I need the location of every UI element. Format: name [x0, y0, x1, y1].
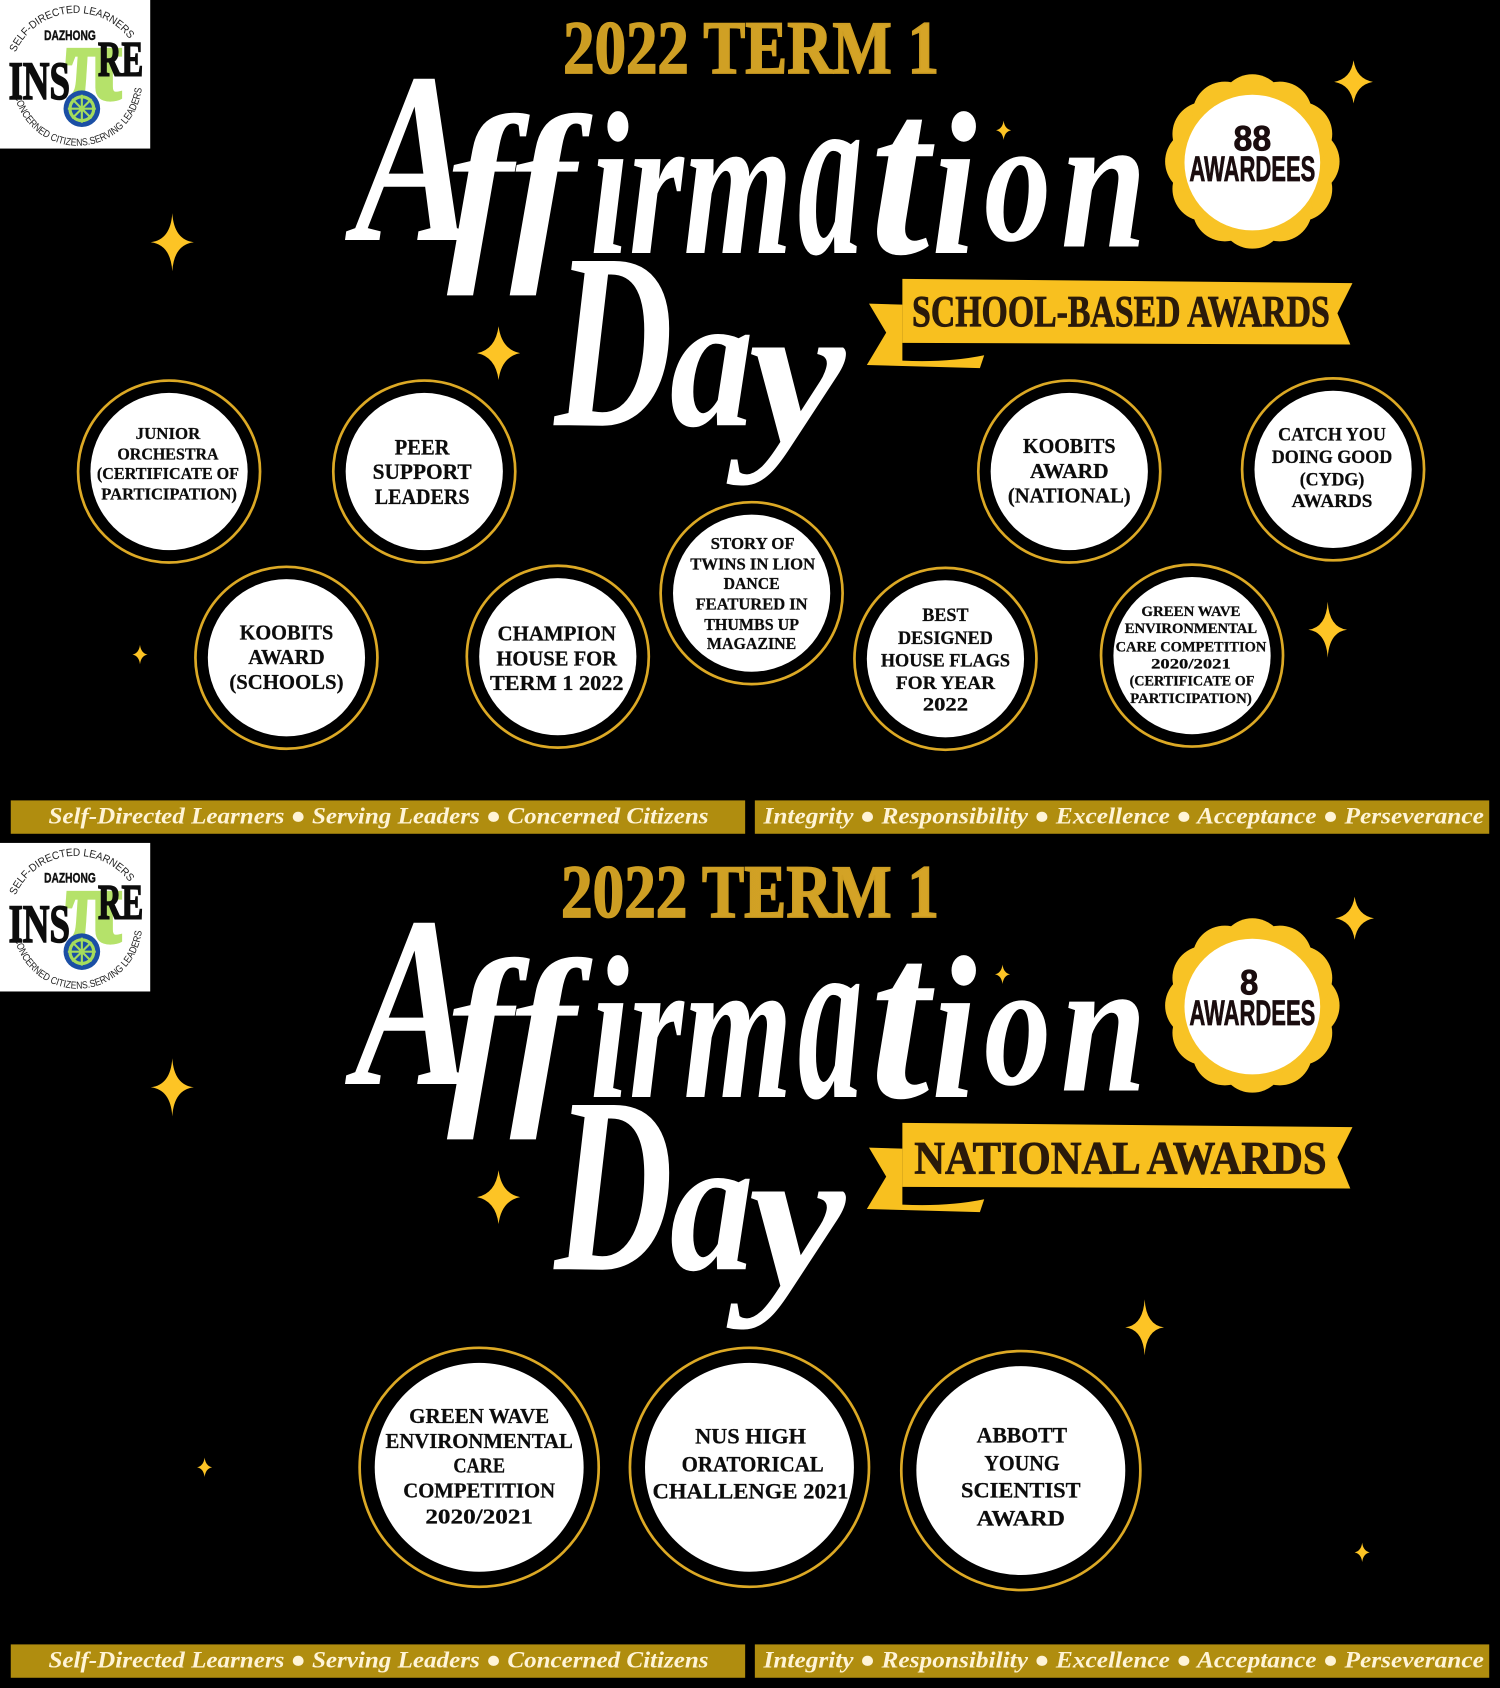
award: Koobits Award (National): KOOBITS: [1023, 434, 1116, 458]
heading: 2022 Term 1: 2022 TERM 1: [561, 851, 939, 934]
award: Koobits Award (National): AWARD: [1030, 459, 1109, 483]
logo: Dazhong Inspire: RE: [98, 31, 143, 86]
award: Best Designed House Flags: FOR YEAR: [896, 673, 995, 694]
award: NUS High Oratorical Challenge: ORATORICAL: [682, 1452, 824, 1477]
award: Champion House: HOUSE FOR: [496, 646, 617, 670]
title: Affirmation: ff: [447, 77, 593, 297]
award: Catch You Doing Good: AWARDS: [1292, 491, 1372, 512]
award: Best Designed House Flags: BEST: [922, 605, 969, 626]
award: Peer Support Leaders: LEADERS: [375, 484, 469, 509]
title: Day: a: [670, 252, 754, 467]
award: Peer Support Leaders: SUPPORT: [373, 459, 472, 484]
panel: national awards: [0, 842, 1490, 1678]
footer bar: learner outcomes: [11, 1644, 745, 1678]
ribbon: national awards: [867, 1123, 1352, 1212]
award: Junior Orchestra: [78, 381, 260, 562]
logo: Dazhong Inspire: RE: [98, 874, 143, 929]
award: Best Designed House Flags: [854, 568, 1036, 750]
award: Junior Orchestra: (CERTIFICATE OF: [97, 464, 239, 483]
award: Abbott Young Scientist: AWARD: [977, 1505, 1065, 1530]
logo: Dazhong Inspire: INS: [9, 51, 70, 111]
logo: Dazhong Inspire: SELF-DIRECTED LEARNERS: [10, 848, 134, 894]
award: Abbott Young Scientist: [901, 1351, 1140, 1590]
heading: 2022 Term 1: 2022 TERM 1: [563, 7, 939, 90]
award: NUS High Oratorical Challenge: [630, 1348, 869, 1587]
logo: Dazhong Inspire: π: [66, 4, 122, 123]
award: Green Wave Environmental Care: GREEN WAVE: [409, 1404, 549, 1428]
title: Affirmation: irm: [590, 916, 793, 1142]
ribbon: school-based awards: [867, 279, 1352, 368]
award: Best Designed House Flags: DESIGNED: [898, 628, 993, 649]
logo: Dazhong Inspire: π: [66, 847, 122, 966]
sparkle stars: [132, 60, 1373, 664]
award: Koobits Award (Schools): [195, 567, 377, 749]
title: Affirmation: ff: [447, 921, 593, 1141]
footer bar: learner outcomes: Self-Directed Learners ● Serving Leaders ● Concerned Citizens: [48, 1648, 709, 1674]
logo: Dazhong Inspire: [0, 0, 150, 149]
title: Affirmation: A: [345, 866, 474, 1137]
award: Green Wave Environmental Care: 2020/2021: [425, 1504, 533, 1528]
panel: school-based awards: [0, 0, 1490, 843]
sparkle stars: [151, 897, 1374, 1562]
title: Affirmation: i: [931, 916, 977, 1142]
award: Green Wave certificate: [1101, 565, 1283, 747]
title: Day: y: [726, 1104, 847, 1330]
award: Story of Twins: DANCE: [724, 574, 780, 593]
award: Story of Twins: [661, 502, 843, 684]
logo: Dazhong Inspire: DAZHONG: [44, 27, 96, 43]
footer bar: values: Integrity ● Responsibility ● Excellence ● Acceptance ● Perseverance: [762, 1648, 1484, 1674]
title: Affirmation: o: [984, 83, 1051, 279]
title: Day: D: [553, 202, 673, 480]
award: Green Wave certificate: ENVIRONMENTAL: [1125, 621, 1257, 637]
award: Green Wave Environmental Care: ENVIRONMENTAL: [385, 1429, 573, 1453]
award: NUS High Oratorical Challenge: CHALLENGE 2021: [653, 1479, 849, 1504]
award: NUS High Oratorical Challenge: NUS HIGH: [695, 1424, 806, 1449]
title: Affirmation: n: [1061, 918, 1147, 1133]
award: Champion House: CHAMPION: [497, 622, 616, 646]
badge: 8 awardees: 8: [1240, 963, 1258, 1003]
title: Affirmation: a: [798, 882, 863, 1150]
title: Day: D: [553, 1046, 673, 1324]
title: Affirmation: t: [870, 43, 935, 305]
logo: Dazhong Inspire: DAZHONG: [44, 870, 96, 886]
award: Champion House: TERM 1 2022: [490, 671, 623, 695]
logo: Dazhong Inspire: SELF-DIRECTED LEARNERS: [10, 6, 134, 52]
award: Green Wave certificate: GREEN WAVE: [1141, 604, 1240, 620]
award: Abbott Young Scientist: YOUNG: [984, 1451, 1060, 1476]
award: Best Designed House Flags: 2022: [923, 695, 968, 716]
award: Junior Orchestra: ORCHESTRA: [117, 445, 219, 464]
logo: Dazhong Inspire: INS: [9, 894, 70, 954]
badge: 88 awardees: 88: [1233, 119, 1271, 159]
award: Koobits Award (National): [978, 381, 1160, 562]
logo: Dazhong Inspire: CONCERNED CITIZENS.SERVING LEADERS: [16, 88, 142, 146]
award: Green Wave Environmental Care: CARE: [453, 1454, 505, 1478]
title: Affirmation: t: [870, 887, 935, 1149]
award: Story of Twins: FEATURED IN: [696, 594, 808, 613]
title: Affirmation: i: [931, 72, 977, 298]
award: Abbott Young Scientist: ABBOTT: [977, 1423, 1067, 1448]
title: Day: y: [726, 260, 847, 486]
ribbon: national awards: NATIONAL AWARDS: [914, 1133, 1327, 1184]
award: Koobits Award (Schools): AWARD: [248, 645, 325, 669]
footer bar: values: Integrity ● Responsibility ● Excellence ● Acceptance ● Perseverance: [762, 804, 1484, 830]
award: Green Wave certificate: (CERTIFICATE OF: [1130, 674, 1254, 690]
badge: 8 awardees: AWARDEES: [1189, 993, 1315, 1033]
logo: Dazhong Inspire: [0, 842, 150, 992]
ribbon: school-based awards: SCHOOL-BASED AWARDS: [912, 287, 1330, 336]
title: Affirmation: a: [798, 38, 863, 306]
award: Koobits Award (Schools): KOOBITS: [240, 620, 333, 644]
award: Junior Orchestra: JUNIOR: [136, 424, 201, 443]
badge: 88 awardees: [1165, 74, 1340, 249]
award: Peer Support Leaders: [333, 381, 515, 562]
award: Junior Orchestra: PARTICIPATION): [101, 485, 237, 504]
award: Catch You Doing Good: CATCH YOU: [1278, 424, 1386, 445]
award: Green Wave certificate: PARTICIPATION): [1130, 691, 1252, 707]
award: Best Designed House Flags: HOUSE FLAGS: [881, 650, 1010, 671]
award: Champion House: [467, 566, 649, 748]
award: Catch You Doing Good: [1242, 378, 1424, 560]
award: Story of Twins: STORY OF: [711, 534, 795, 553]
award: Green Wave certificate: 2020/2021: [1151, 657, 1231, 673]
badge: 88 awardees: AWARDEES: [1189, 149, 1315, 189]
award: Koobits Award (Schools): (SCHOOLS): [229, 670, 344, 694]
award: Catch You Doing Good: DOING GOOD: [1272, 447, 1392, 468]
award: Peer Support Leaders: PEER: [395, 434, 450, 459]
logo: Dazhong Inspire: CONCERNED CITIZENS.SERVING LEADERS: [16, 930, 142, 989]
award: Story of Twins: MAGAZINE: [707, 634, 796, 653]
title: Affirmation: o: [984, 927, 1051, 1123]
award: Green Wave Environmental Care: COMPETITION: [403, 1478, 556, 1502]
footer bar: learner outcomes: Self-Directed Learners ● Serving Leaders ● Concerned Citizens: [48, 804, 709, 830]
title: Day: a: [670, 1096, 754, 1311]
award: Catch You Doing Good: (CYDG): [1300, 470, 1364, 491]
award: Green Wave Environmental Care: [360, 1348, 599, 1587]
badge: 8 awardees: [1165, 918, 1340, 1093]
award: Story of Twins: TWINS IN LION: [690, 554, 815, 573]
title: Affirmation: irm: [590, 72, 793, 298]
award: Abbott Young Scientist: SCIENTIST: [961, 1477, 1081, 1502]
award: Green Wave certificate: CARE COMPETITION: [1116, 639, 1266, 655]
footer bar: learner outcomes: [11, 800, 745, 834]
award: Koobits Award (National): (NATIONAL): [1008, 484, 1131, 508]
award: Story of Twins: THUMBS UP: [704, 615, 799, 634]
title: Affirmation: n: [1061, 74, 1147, 289]
title: Affirmation: A: [345, 22, 474, 293]
